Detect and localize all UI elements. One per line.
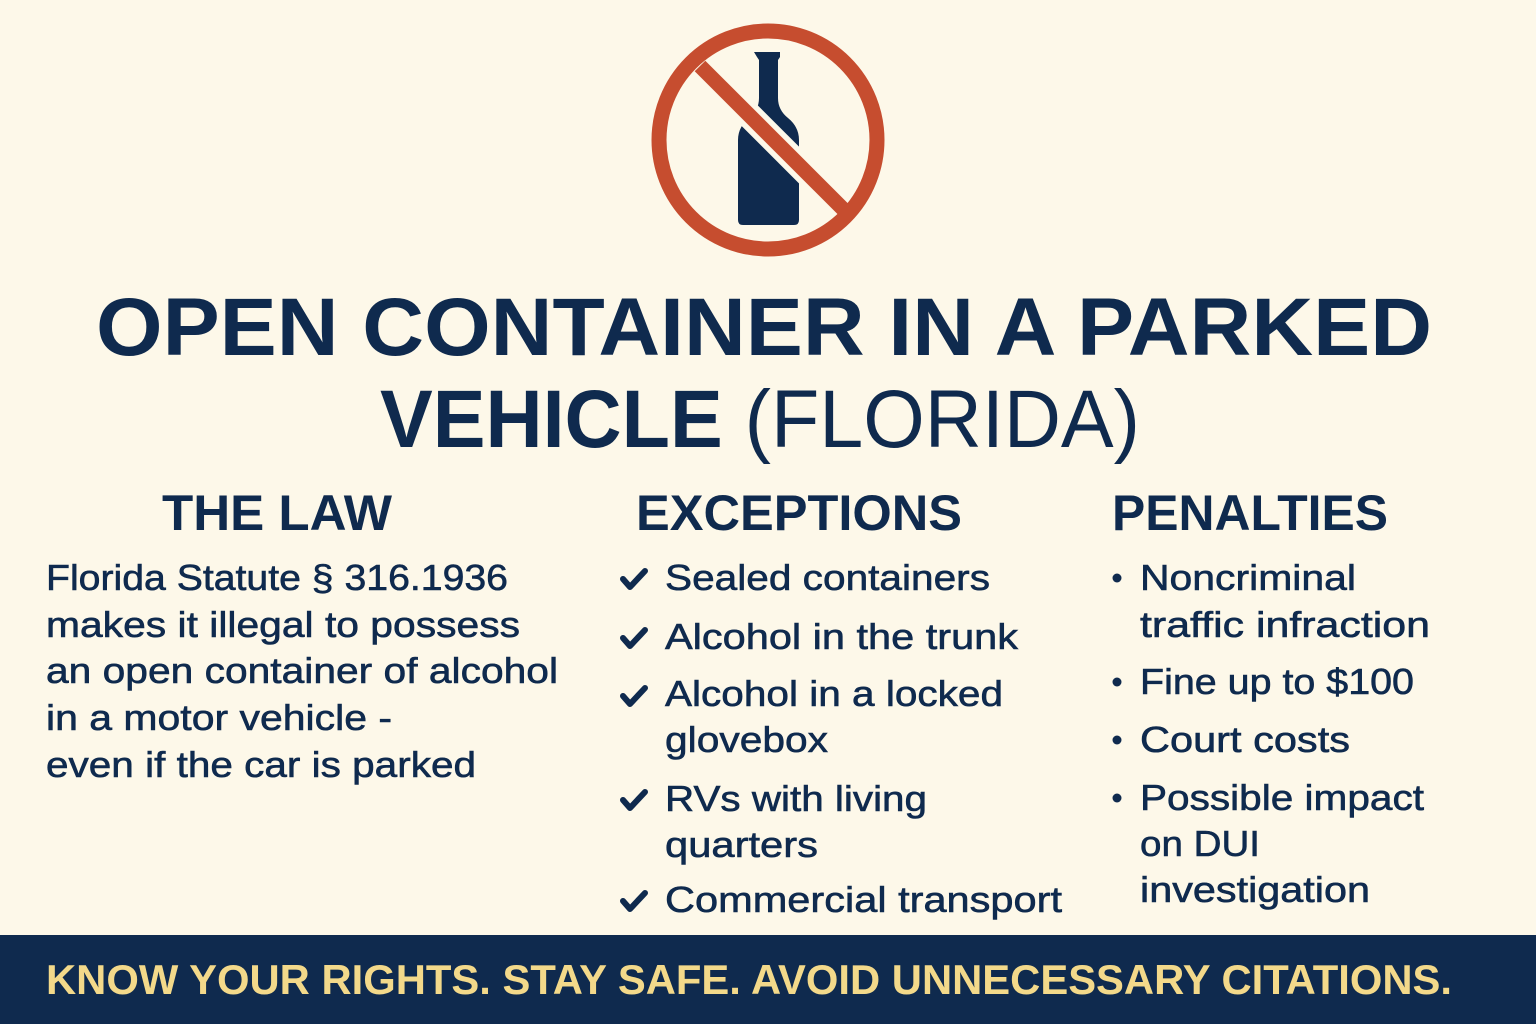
text block: law description: even if the car is parked — [46, 744, 476, 785]
list: penalties: Possible impact — [1140, 777, 1424, 818]
panel: exceptions — [623, 485, 1062, 920]
footer banner — [0, 935, 1536, 1024]
list: exceptions: RVs with living — [665, 778, 927, 819]
list: penalties: on DUI — [1140, 823, 1260, 864]
list: penalties: traffic infraction — [1140, 604, 1430, 645]
list: penalties: Fine up to $100 — [1140, 661, 1414, 702]
heading: exceptions: EXCEPTIONS — [636, 485, 962, 541]
list: penalties: Noncriminal — [1140, 557, 1356, 598]
list: exceptions: quarters — [665, 824, 818, 865]
list: exceptions: glovebox — [665, 719, 828, 760]
panel: the law — [46, 485, 558, 785]
title — [96, 282, 1432, 465]
list: exceptions: Commercial transport — [665, 879, 1062, 920]
icon: no alcohol sign — [659, 31, 877, 249]
text block: law description — [46, 557, 558, 785]
footer banner: KNOW YOUR RIGHTS. STAY SAFE. AVOID UNNECESSARY CITATIONS. — [46, 956, 1452, 1003]
list: exceptions: Alcohol in the trunk — [665, 616, 1019, 657]
text block: law description: Florida Statute § 316.1936 — [46, 557, 508, 598]
list: exceptions: Sealed containers — [665, 557, 990, 598]
title: VEHICLE (FLORIDA) — [380, 374, 1140, 465]
heading: the law: THE LAW — [162, 485, 393, 541]
text block: law description: makes it illegal to possess — [46, 604, 520, 645]
list: exceptions: Alcohol in a locked — [665, 673, 1003, 714]
title: OPEN CONTAINER IN A PARKED — [96, 282, 1432, 373]
text block: law description: an open container of alcohol — [46, 650, 558, 691]
list: penalties: investigation — [1140, 869, 1370, 910]
list: penalties: Court costs — [1140, 719, 1350, 760]
list: penalties — [1112, 557, 1430, 910]
panel: penalties — [1112, 485, 1430, 910]
list: exceptions — [623, 557, 1062, 920]
heading: penalties: PENALTIES — [1112, 485, 1388, 541]
text block: law description: in a motor vehicle - — [46, 697, 392, 738]
